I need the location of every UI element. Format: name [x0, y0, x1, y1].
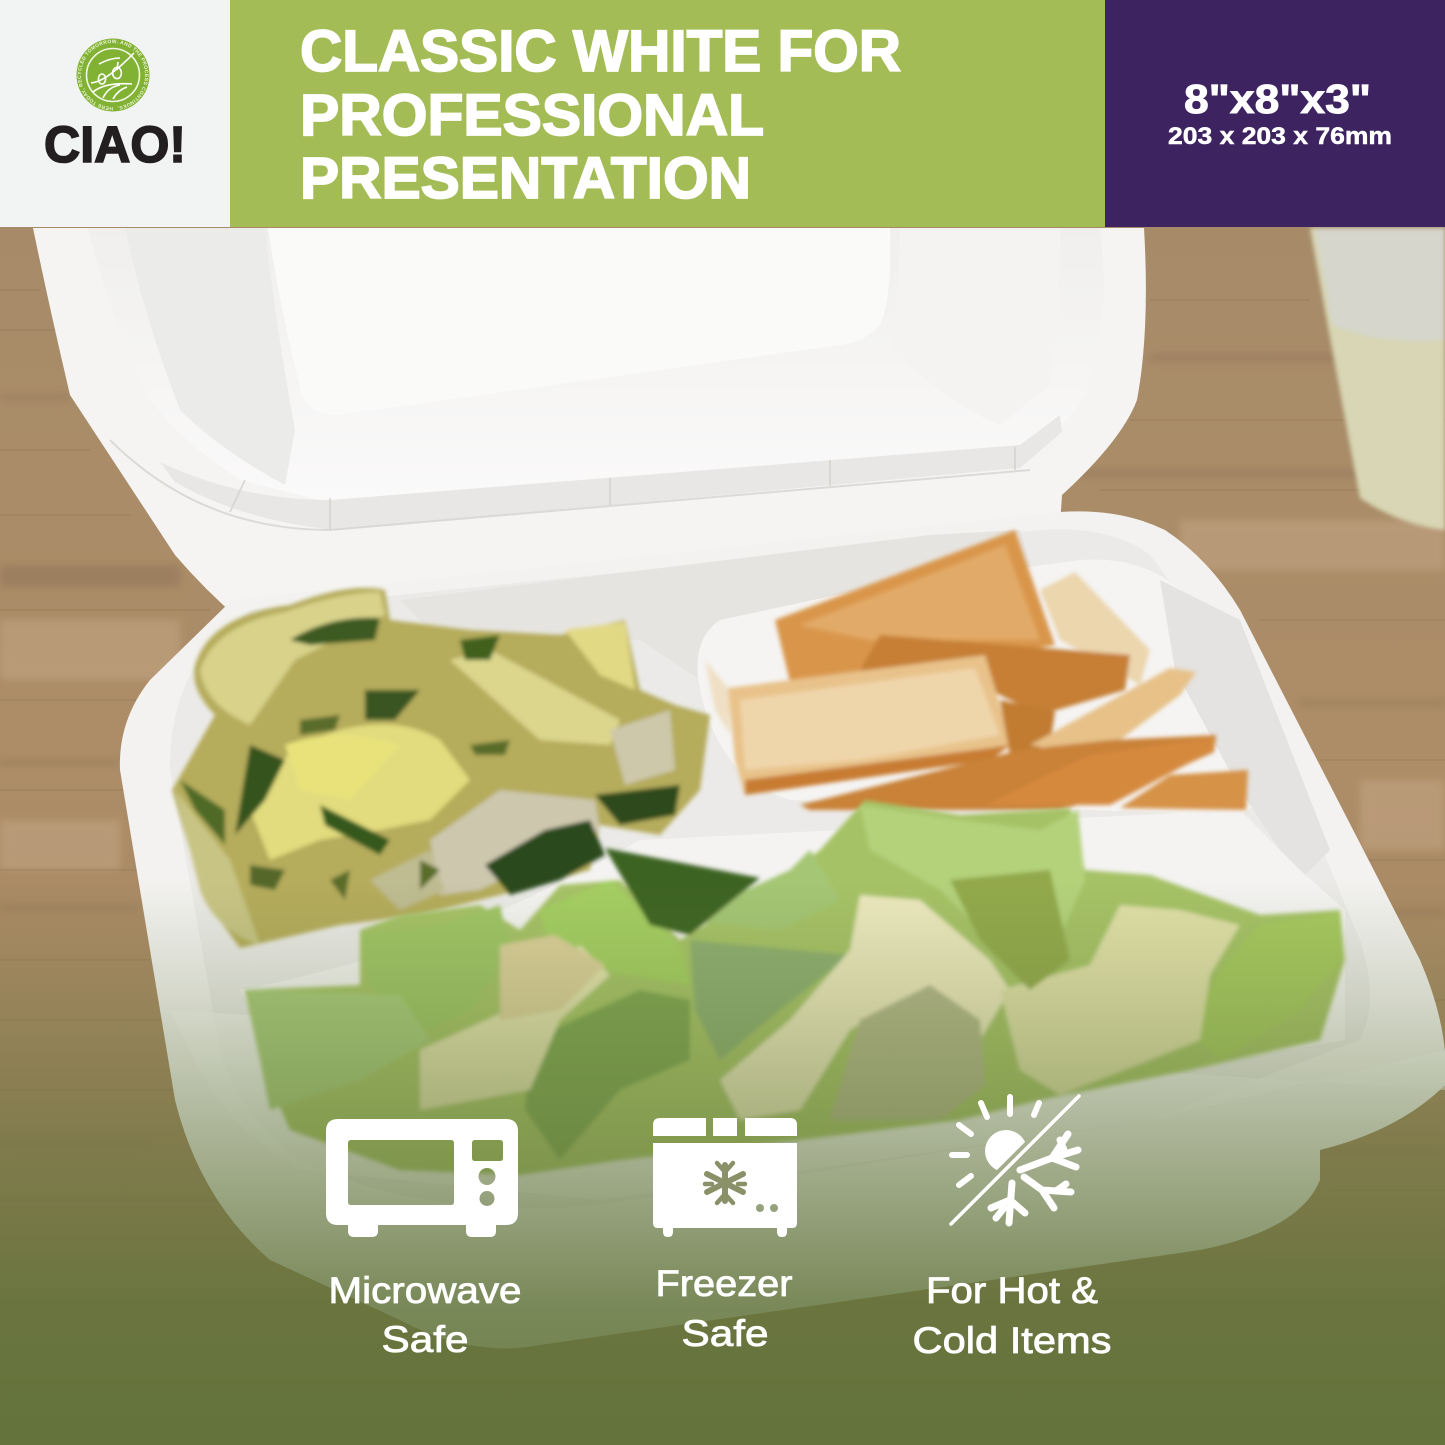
icon: microwave: [326, 1119, 518, 1237]
green fade overlay: [0, 880, 1445, 1445]
label: [912, 1270, 1112, 1361]
label: [656, 1263, 792, 1354]
feature: microwave safe: [326, 1119, 522, 1360]
brand name: CIAO!: [44, 116, 186, 173]
food: pasta: [172, 588, 710, 948]
panel: dimensions: [1105, 0, 1445, 227]
panel: logo: [0, 0, 230, 227]
label: For Hot &: [926, 1270, 1098, 1311]
open lid: [33, 228, 1146, 620]
label: Cold Items: [912, 1320, 1112, 1361]
label: Freezer: [656, 1263, 792, 1304]
feature: hot and cold: [912, 1096, 1112, 1361]
label: Safe: [682, 1313, 768, 1354]
feature: freezer safe: [653, 1118, 797, 1354]
title: [300, 19, 901, 211]
label: Microwave: [328, 1270, 522, 1311]
icon: chest freezer: [653, 1118, 797, 1237]
dimensions in millimetres: 203 x 203 x 76mm: [1168, 123, 1392, 150]
icon: round olive badge: HERE TODAY, RECYCLED TOMORROW. AND THE PROCESS CONTINUES.: [78, 40, 148, 110]
label: Safe: [382, 1319, 468, 1360]
food: pita chips: [705, 530, 1248, 810]
plastic cup: [1310, 228, 1445, 530]
label: [328, 1270, 522, 1360]
tray base: [120, 511, 1445, 1348]
title: PROFESSIONAL: [300, 83, 764, 148]
icon: sun and snowflake: [951, 1096, 1079, 1224]
title: PRESENTATION: [300, 146, 751, 211]
dimensions in inches: 8"x8"x3": [1184, 76, 1371, 122]
food: salad: [245, 800, 1345, 1175]
panel: headline: [230, 0, 1105, 227]
title: CLASSIC WHITE FOR: [300, 19, 901, 84]
